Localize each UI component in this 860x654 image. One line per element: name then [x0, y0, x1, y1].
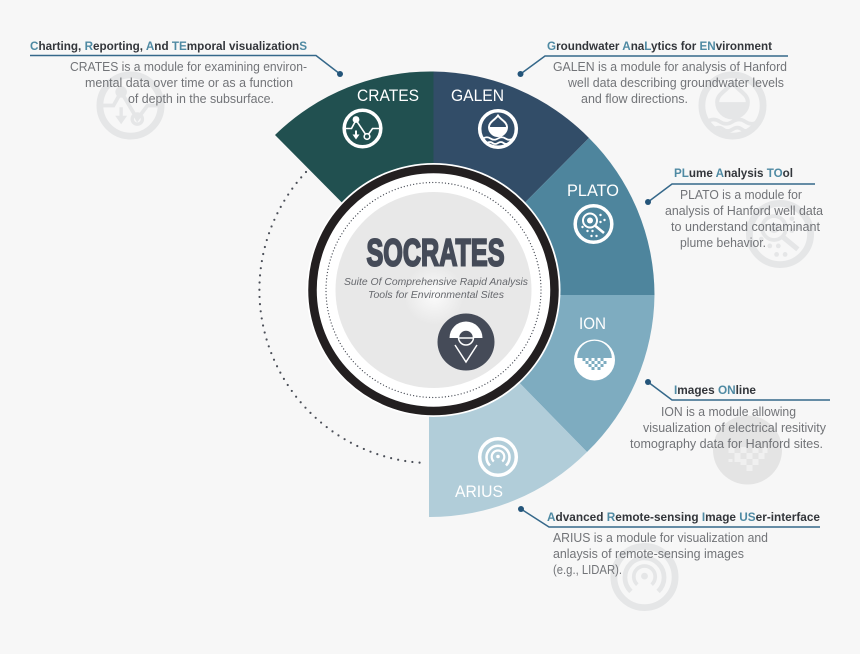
- icon: ARIUS signal: [480, 439, 516, 475]
- text block: GALEN description: well data describing groundwater levels: [567, 76, 784, 90]
- leader line: GALEN: [518, 56, 788, 77]
- text block: PLATO description: analysis of Hanford well data: [665, 204, 823, 218]
- heading: ION: Images ONline: [674, 383, 756, 397]
- ghost icon: ION: [713, 416, 782, 484]
- heading: CRATES: Charting, Reporting, And TEmporal visualizationS: [30, 39, 307, 53]
- heading: PLATO: PLume Analysis TOol: [674, 166, 793, 180]
- leader line: ION: [645, 379, 830, 400]
- text block: ION description: visualization of electrical resitivity: [643, 421, 827, 435]
- text block: ION description: [630, 405, 827, 451]
- heading: GALEN: Groundwater AnaLytics for ENvironment: [547, 39, 772, 53]
- panel: central SOCRATES disc: [306, 163, 560, 417]
- label: ARIUS: ARIUS: [455, 482, 503, 501]
- ghost icon: GALEN: [702, 75, 763, 136]
- label: CRATES: CRATES: [357, 86, 419, 105]
- text block: GALEN description: [553, 60, 787, 106]
- text block: GALEN description: GALEN is a module for analysis of Hanford: [553, 60, 787, 74]
- leader line: ARIUS: [518, 506, 820, 527]
- text block: ARIUS description: ARIUS is a module for visualization and: [553, 531, 768, 545]
- ghost icon: PLATO: [749, 203, 811, 265]
- text block: ION description: ION is a module allowing: [661, 405, 796, 419]
- text block: CRATES description: CRATES is a module for examining environ-: [70, 60, 307, 74]
- panel: CRATES segment: [275, 71, 434, 295]
- dotted orbit arc: [259, 172, 426, 463]
- leader line: PLATO: [645, 184, 815, 205]
- callout: CRATES: [30, 39, 343, 106]
- leader line: CRATES: [30, 56, 343, 77]
- text block: ION description: tomography data for Hanford sites.: [630, 437, 823, 451]
- text block: PLATO description: PLATO is a module for: [680, 188, 802, 202]
- heading: ARIUS: Advanced Remote-sensing Image USer-interface: [547, 510, 820, 524]
- icon: GALEN water drop: [480, 111, 516, 147]
- subtitle: Suite Of Comprehensive Rapid Analysis: [344, 276, 529, 288]
- callout: ION: [630, 379, 830, 451]
- panel: GALEN segment: [434, 72, 589, 295]
- text block: PLATO description: [665, 188, 823, 250]
- callout: PLATO: [645, 166, 823, 250]
- subtitle: [344, 276, 529, 301]
- label: PLATO: PLATO: [567, 181, 619, 200]
- text block: ARIUS description: (e.g., LIDAR).: [553, 563, 622, 577]
- text block: CRATES description: of depth in the subsurface.: [128, 92, 274, 106]
- text block: ARIUS description: [553, 531, 768, 577]
- text block: ARIUS description: anlaysis of remote-sensing images: [553, 547, 744, 561]
- subtitle: Tools for Environmental Sites: [368, 289, 505, 301]
- label: ION: ION: [579, 314, 606, 333]
- panel: PLATO segment: [434, 138, 654, 295]
- label: GALEN: GALEN: [451, 86, 504, 105]
- callout: GALEN: [518, 39, 788, 106]
- text block: PLATO description: plume behavior.: [680, 236, 766, 250]
- title: SOCRATES: [366, 232, 504, 274]
- icon: CRATES chart: [344, 110, 381, 147]
- ghost icon: CRATES: [100, 75, 161, 136]
- icon: ION tomography: [574, 340, 615, 380]
- text block: PLATO description: to understand contaminant: [671, 220, 821, 234]
- icon: SOCRATES logo: [438, 314, 494, 370]
- text block: CRATES description: mental data over time or as a function: [85, 76, 293, 90]
- callout: ARIUS: [518, 506, 820, 577]
- icon: PLATO magnifier: [575, 206, 612, 242]
- text block: CRATES description: [70, 60, 307, 106]
- panel: ION segment: [434, 295, 654, 452]
- panel: ARIUS segment: [429, 295, 587, 517]
- ghost icon: ARIUS: [614, 546, 675, 608]
- text block: GALEN description: and flow directions.: [581, 92, 688, 106]
